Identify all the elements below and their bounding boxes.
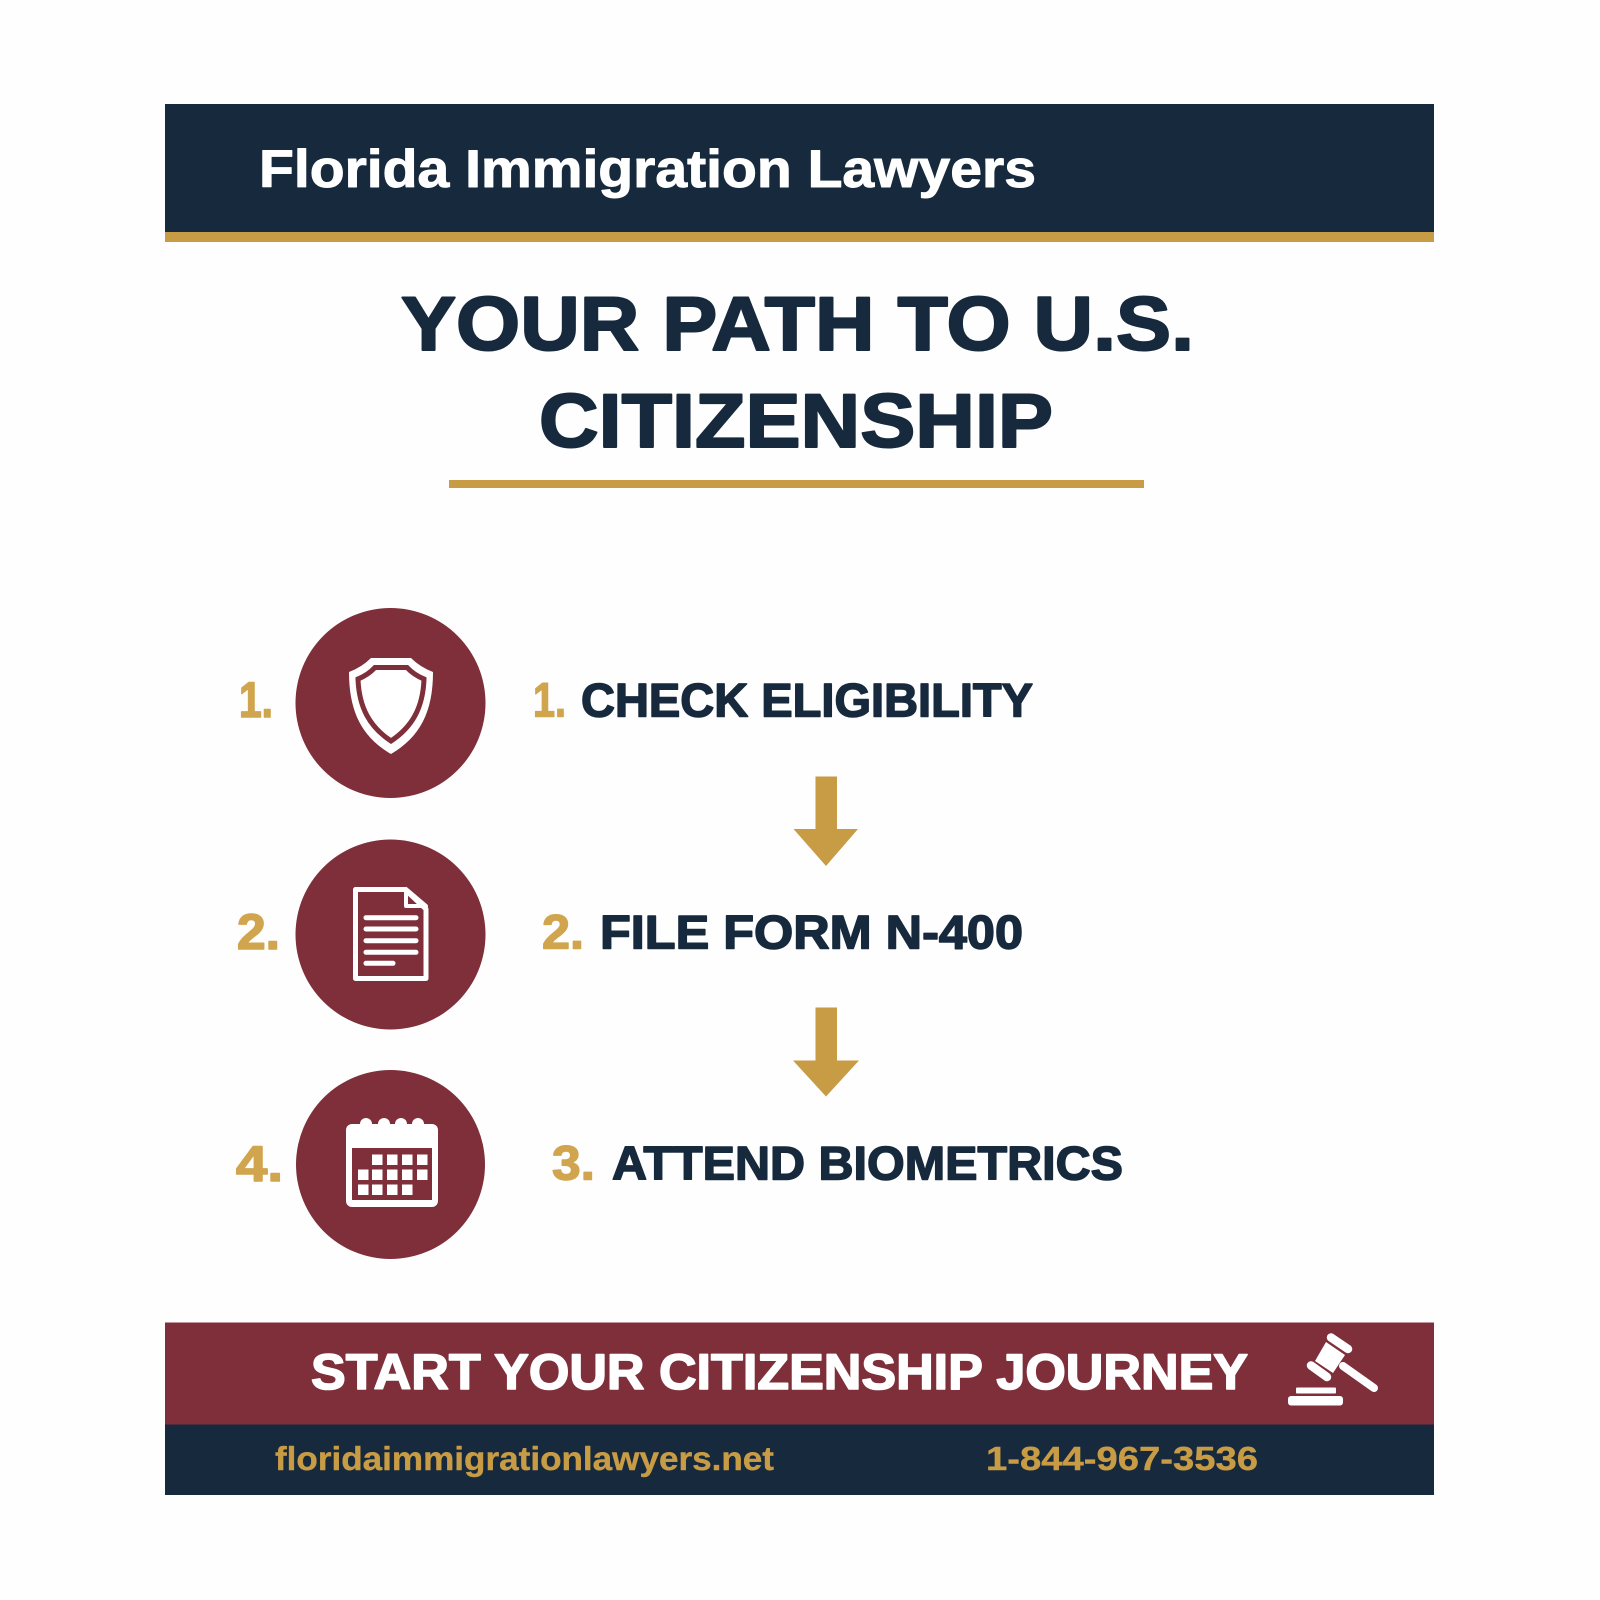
arrow 1 to 2: [794, 776, 858, 866]
step 2: [237, 840, 1023, 1030]
step 2 label: FILE FORM N-400: [600, 906, 1023, 958]
contact band: [165, 1424, 1434, 1495]
title underline: [449, 480, 1144, 488]
icon: gavel: [1288, 1338, 1374, 1406]
step 3 icon: calendar: [296, 1070, 485, 1259]
step 2 icon: document: [296, 840, 486, 1030]
step 2 left number: 2.: [237, 904, 280, 960]
title: YOUR PATH TO U.S.: [401, 282, 1194, 367]
step 3: [236, 1070, 1123, 1259]
phone: 1-844-967-3536: [986, 1440, 1258, 1477]
step 2 label: 2.: [542, 906, 584, 960]
step 1 left number: 1.: [239, 672, 273, 728]
step 1 icon: shield: [296, 608, 486, 798]
call to action text: START YOUR CITIZENSHIP JOURNEY: [311, 1344, 1248, 1400]
step 1: [239, 608, 1033, 798]
step 1 label: 1.: [533, 674, 566, 728]
header band: [165, 104, 1434, 242]
title: [401, 282, 1194, 464]
step 1 label: CHECK ELIGIBILITY: [581, 674, 1033, 726]
step 3 label: ATTEND BIOMETRICS: [612, 1136, 1123, 1190]
header brand name: Florida Immigration Lawyers: [259, 140, 1036, 199]
arrow 2 to 3: [793, 1008, 859, 1096]
website: floridaimmigrationlawyers.net: [275, 1440, 774, 1477]
title: CITIZENSHIP: [539, 379, 1053, 464]
call to action band: [165, 1322, 1434, 1424]
step 3 label: 3.: [552, 1138, 595, 1190]
step 3 left number: 4.: [236, 1136, 283, 1192]
